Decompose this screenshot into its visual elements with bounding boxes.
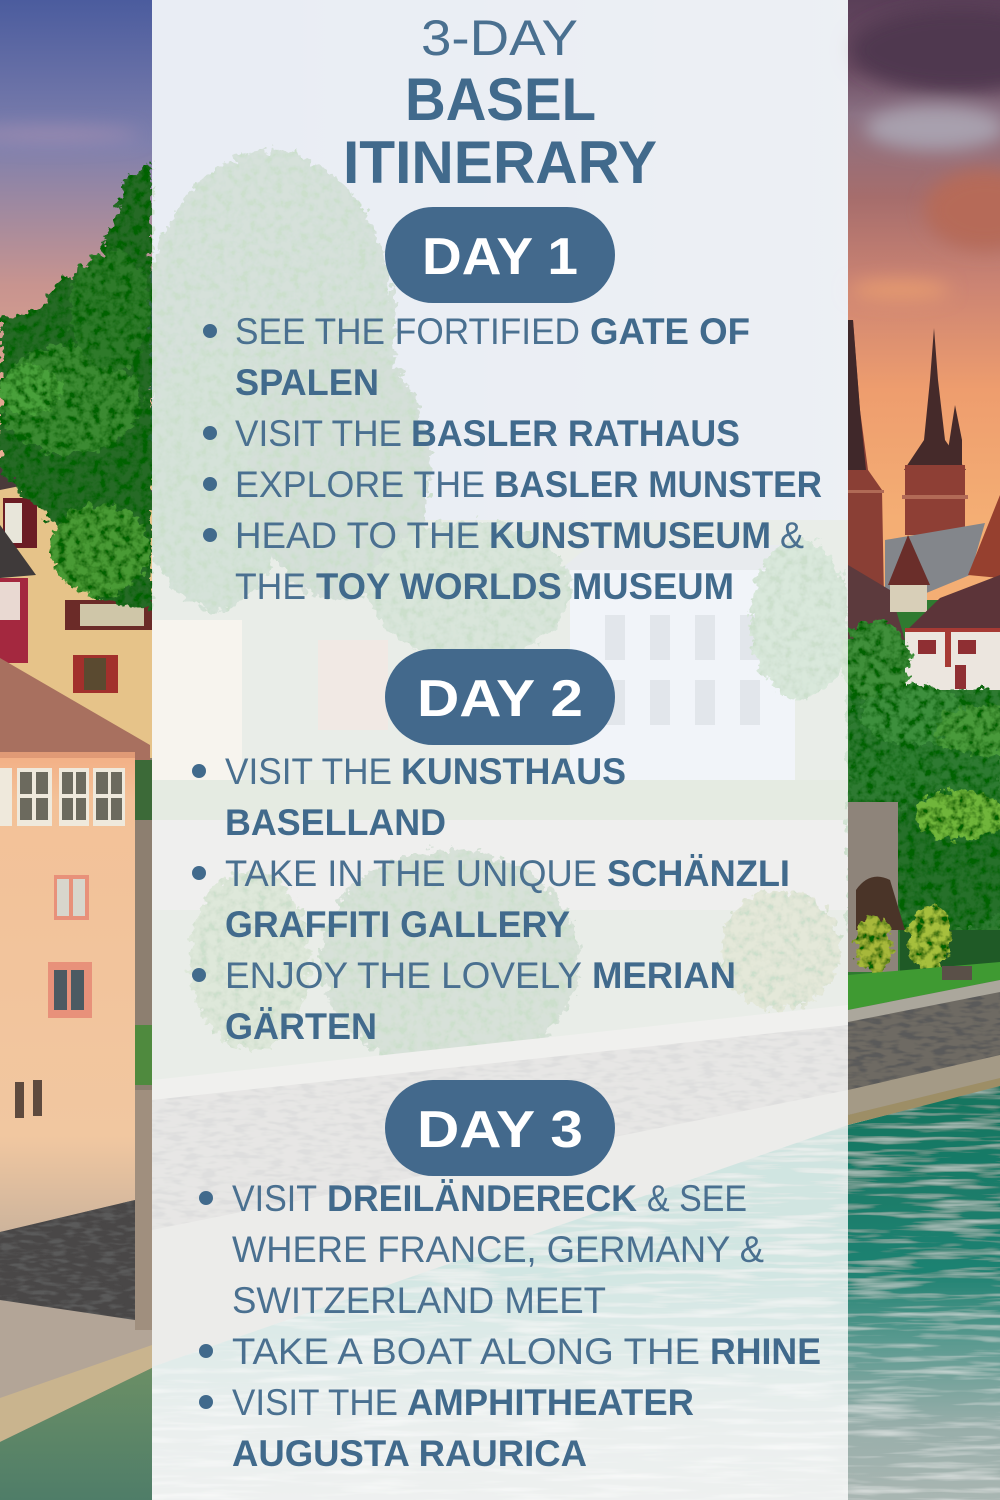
list item: Dreiländereck xyxy=(199,1178,764,1321)
list item: Kunsthaus Baselland: VISIT THE xyxy=(225,751,392,792)
list item: Basler Rathaus: VISIT THE xyxy=(235,413,402,454)
background: right trees and embankment xyxy=(840,620,1000,1125)
list item: Kunstmuseum and Toy Worlds Museum: HEAD TO THE xyxy=(235,515,480,556)
background: river xyxy=(152,1085,1000,1500)
list item: Amphitheater Augusta Raurica: AUGUSTA RAURICA xyxy=(232,1433,587,1474)
list item: Basler Rathaus xyxy=(203,413,740,454)
list item: Dreiländereck: & SEE xyxy=(647,1178,747,1219)
list item: Schänzli Graffiti Gallery: GRAFFITI GALLERY xyxy=(225,904,570,945)
list item: Dreiländereck: VISIT xyxy=(232,1178,317,1219)
list item: Merian Gärten xyxy=(192,955,736,1047)
list item: Basler Munster: EXPLORE THE xyxy=(235,464,485,505)
list item: Basler Rathaus: BASLER RATHAUS xyxy=(411,413,740,454)
list item: Kunsthaus Baselland xyxy=(192,751,626,843)
title xyxy=(343,10,657,196)
list item: Dreiländereck: DREILÄNDERECK xyxy=(327,1178,637,1219)
badge: day 1 xyxy=(385,207,615,303)
title: BASEL xyxy=(405,66,596,133)
list item: Schänzli Graffiti Gallery xyxy=(192,853,790,945)
background: centre scene xyxy=(140,150,850,1367)
badge: day 2: DAY 2 xyxy=(417,670,583,728)
badge: day 3 xyxy=(385,1080,615,1176)
list item: Amphitheater Augusta Raurica xyxy=(199,1382,694,1474)
list item: Kunstmuseum and Toy Worlds Museum: THE xyxy=(235,566,306,607)
list item: Merian Gärten: ENJOY THE LOVELY xyxy=(225,955,582,996)
title: ITINERARY xyxy=(343,129,657,196)
background: left tree xyxy=(0,165,152,610)
list item: Rhine boat: RHINE xyxy=(710,1331,821,1372)
list item: Schänzli Graffiti Gallery: TAKE IN THE UNIQUE xyxy=(225,853,597,894)
list item: Kunstmuseum and Toy Worlds Museum: & xyxy=(780,515,804,556)
title: 3-DAY xyxy=(421,10,578,66)
panel: day 1 xyxy=(203,207,822,607)
panel: day 2 xyxy=(192,649,790,1047)
list item: Basler Munster xyxy=(203,464,822,505)
list item: Kunsthaus Baselland: BASELLAND xyxy=(225,802,446,843)
list item: Dreiländereck: SWITZERLAND MEET xyxy=(232,1280,606,1321)
list item: Kunstmuseum and Toy Worlds Museum xyxy=(203,515,804,607)
list item: Rhine boat: TAKE A BOAT ALONG THE xyxy=(232,1331,700,1372)
background: left orange tower xyxy=(0,752,152,1500)
list item: Gate of Spalen: SPALEN xyxy=(235,362,379,403)
list item: Kunstmuseum and Toy Worlds Museum: KUNSTMUSEUM xyxy=(489,515,771,556)
list item: Schänzli Graffiti Gallery: SCHÄNZLI xyxy=(607,853,790,894)
list item: Amphitheater Augusta Raurica: AMPHITHEATER xyxy=(407,1382,694,1423)
background: left yellow building xyxy=(0,460,152,760)
badge: day 1: DAY 1 xyxy=(422,228,578,286)
list item: Merian Gärten: GÄRTEN xyxy=(225,1006,377,1047)
panel: translucent white text panel xyxy=(152,0,848,1500)
badge: day 3: DAY 3 xyxy=(417,1101,583,1159)
list item: Amphitheater Augusta Raurica: VISIT THE xyxy=(232,1382,398,1423)
panel: day 3 xyxy=(199,1080,821,1474)
list item: Gate of Spalen: SEE THE FORTIFIED xyxy=(235,311,580,352)
list item: Merian Gärten: MERIAN xyxy=(592,955,736,996)
list item: Kunsthaus Baselland: KUNSTHAUS xyxy=(401,751,626,792)
list item: Dreiländereck: WHERE FRANCE, GERMANY & xyxy=(232,1229,764,1270)
background: right cathedral xyxy=(848,320,1000,690)
list item: Gate of Spalen xyxy=(203,311,750,403)
list item: Kunstmuseum and Toy Worlds Museum: TOY WORLDS MUSEUM xyxy=(316,566,734,607)
list item: Basler Munster: BASLER MUNSTER xyxy=(494,464,822,505)
list item: Gate of Spalen: GATE OF xyxy=(590,311,750,352)
badge: day 2 xyxy=(385,649,615,745)
